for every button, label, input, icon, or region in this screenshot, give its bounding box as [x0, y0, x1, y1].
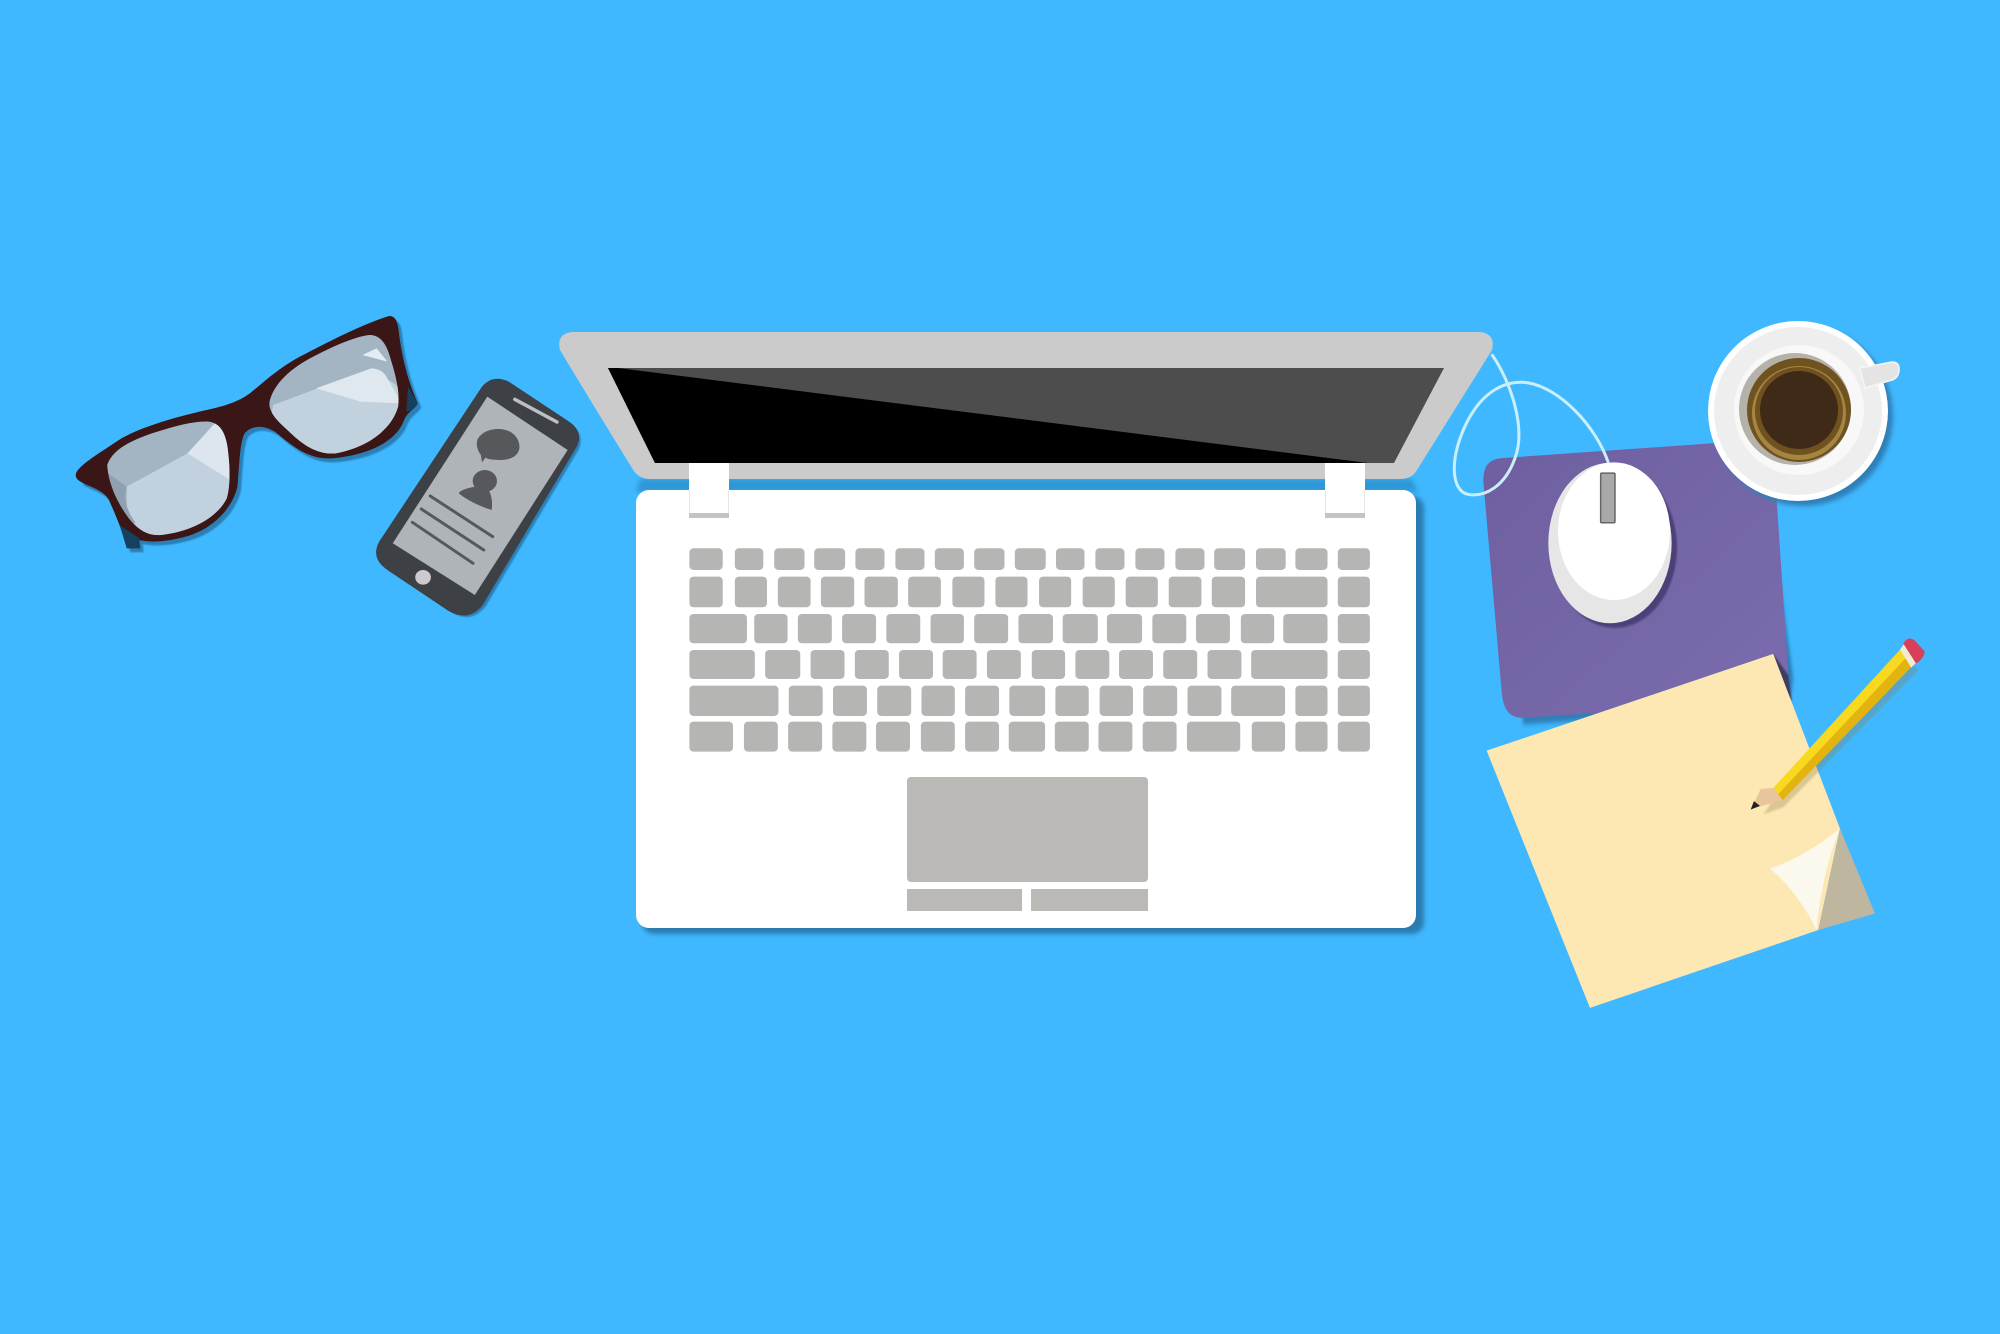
mouse shadow: [1553, 468, 1677, 628]
pencil body: [1773, 647, 1913, 800]
phone body: [376, 379, 579, 615]
pencil wood tip: [1752, 788, 1783, 809]
touchpad: [907, 777, 1148, 882]
glasses frame: [76, 316, 418, 548]
cup handle: [1860, 362, 1899, 388]
pencil lead: [1751, 801, 1760, 810]
coffee: [1739, 353, 1851, 465]
temple tip right: [406, 387, 418, 412]
key row 4: [689, 650, 1370, 679]
hinge right: [1325, 463, 1365, 518]
keyboard: [689, 548, 1370, 752]
home button: [415, 570, 431, 585]
pencil eraser: [1903, 638, 1925, 663]
laptop lid: [559, 332, 1493, 479]
key row 3: [689, 614, 1370, 643]
cup rim: [1734, 345, 1864, 475]
speech bubble: [477, 429, 519, 462]
mouse top: [1558, 462, 1670, 600]
glasses shadow: [80, 320, 421, 552]
hinge left: [689, 463, 729, 518]
laptop base shadow: [642, 496, 1424, 934]
key row 6: [689, 722, 1370, 752]
mouse body: [1548, 463, 1672, 623]
phone screen: [393, 397, 568, 595]
key row 1: [689, 548, 1370, 570]
person icon: [459, 470, 497, 510]
mouse cable: [1454, 354, 1608, 495]
mouse pad: [1483, 441, 1788, 718]
scroll wheel: [1601, 473, 1615, 523]
laptop: [559, 332, 1493, 934]
icon: coffee cup: [1708, 321, 1899, 506]
speaker: [515, 399, 557, 422]
note shadow: [1773, 654, 1792, 701]
note sheet: [1487, 654, 1840, 1008]
sticky note and pencil: [1487, 638, 1925, 1008]
note page fold back: [1818, 829, 1875, 930]
pencil ferrule: [1900, 643, 1917, 668]
icon: smartphone: [376, 379, 581, 617]
pencil: [1751, 638, 1925, 814]
touchpad right button: [1031, 889, 1148, 911]
screen reflection: [608, 368, 1368, 463]
phone shadow: [381, 383, 581, 617]
icon: glasses: [76, 316, 421, 552]
pencil shadow: [1763, 659, 1918, 814]
saucer shadow: [1713, 326, 1893, 506]
saucer: [1708, 321, 1888, 501]
touchpad left button: [907, 889, 1022, 911]
left lens: [107, 422, 230, 536]
text lines: [412, 496, 493, 563]
key row 5: [689, 686, 1370, 716]
screen: [608, 368, 1444, 463]
mouse pad and mouse group: [1454, 354, 1793, 725]
lid shadow: [636, 479, 1418, 492]
laptop base: [636, 490, 1416, 928]
mouse: [1548, 462, 1672, 623]
right lens: [269, 335, 399, 454]
temple tip left: [120, 525, 140, 548]
pencil body shade: [1778, 656, 1913, 800]
mouse pad shadow: [1497, 460, 1793, 725]
key row 2: [689, 577, 1370, 607]
note curled flap: [1770, 829, 1840, 930]
